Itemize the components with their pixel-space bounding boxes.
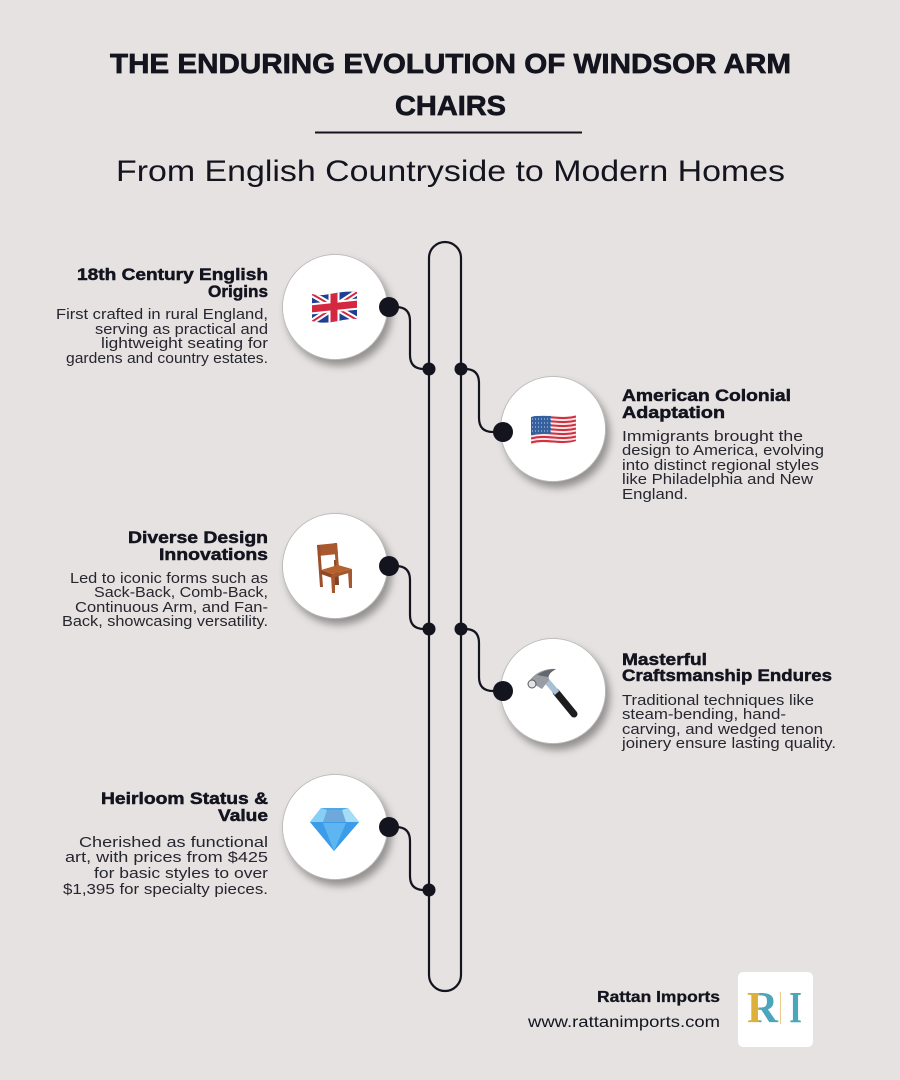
title xyxy=(110,48,791,121)
heading: American adaptation: American Colonial xyxy=(622,386,791,405)
timeline spine xyxy=(429,242,461,991)
text: craftsmanship xyxy=(621,693,836,752)
icon: diamond xyxy=(310,808,359,851)
heading: design innovations: Diverse Design xyxy=(128,528,268,547)
icon: US flag xyxy=(531,415,576,445)
text: heirloom value: $1,395 for specialty pieces. xyxy=(63,882,268,898)
text: design innovations: Sack-Back, Comb-Back, xyxy=(94,585,268,601)
text: English origins xyxy=(56,307,268,367)
circle: heirloom value xyxy=(282,774,388,880)
panel: craftsmanship xyxy=(493,638,836,752)
text: craftsmanship: carving, and wedged tenon xyxy=(622,722,823,738)
connector: English origins xyxy=(389,307,436,376)
heading: English origins: Origins xyxy=(208,282,268,301)
footer: brand: Rattan Imports xyxy=(597,989,720,1006)
node: heirloom value xyxy=(379,817,399,837)
subtitle: From English Countryside to Modern Homes xyxy=(116,155,785,188)
text: English origins: gardens and country estates. xyxy=(66,351,268,367)
text: craftsmanship: steam-bending, hand- xyxy=(622,707,786,723)
heading: American adaptation xyxy=(622,386,791,422)
logo xyxy=(738,972,813,1047)
title: CHAIRS xyxy=(395,90,506,121)
text: English origins: First crafted in rural England, xyxy=(56,307,268,323)
circle: English origins xyxy=(282,254,388,360)
text: American adaptation: England. xyxy=(622,487,688,503)
text: American adaptation xyxy=(622,429,824,503)
heading: craftsmanship xyxy=(622,650,832,685)
text: heirloom value: art, with prices from $425 xyxy=(65,850,268,866)
connector: design innovations xyxy=(389,566,436,636)
node: English origins xyxy=(379,297,399,317)
heading: American adaptation: Adaptation xyxy=(622,403,725,422)
panel: heirloom value xyxy=(63,774,399,898)
circle: craftsmanship xyxy=(500,638,606,744)
heading: heirloom value xyxy=(101,789,268,825)
text: craftsmanship: joinery ensure lasting quality. xyxy=(621,736,836,752)
node: design innovations xyxy=(379,556,399,576)
text: heirloom value xyxy=(63,835,268,898)
heading: English origins xyxy=(77,265,268,301)
text: English origins: lightweight seating for xyxy=(101,336,268,352)
panel: American adaptation xyxy=(493,376,824,503)
text: American adaptation: into distinct regional styles xyxy=(622,458,819,474)
connector: craftsmanship xyxy=(454,622,503,691)
icon: hammer xyxy=(528,669,574,714)
heading: heirloom value: Value xyxy=(218,806,268,825)
node: craftsmanship xyxy=(493,681,513,701)
footer: brand xyxy=(527,989,720,1031)
text: American adaptation: Immigrants brought the xyxy=(622,429,803,445)
icon: UK flag xyxy=(312,292,357,323)
text: design innovations: Led to iconic forms such as xyxy=(70,571,268,587)
footer: brand: www.rattanimports.com xyxy=(527,1014,720,1031)
circle: design innovations xyxy=(282,514,388,618)
heading: heirloom value: Heirloom Status & xyxy=(101,789,268,808)
panel: design innovations xyxy=(62,514,399,630)
logo: R xyxy=(747,983,779,1032)
heading: design innovations: Innovations xyxy=(159,545,268,564)
text: design innovations: Back, showcasing versatility. xyxy=(62,614,268,630)
logo: I xyxy=(789,983,802,1032)
text: craftsmanship: Traditional techniques like xyxy=(622,693,814,709)
heading: craftsmanship: Masterful xyxy=(622,650,707,669)
text: design innovations: Continuous Arm, and Fan- xyxy=(75,600,268,616)
text: heirloom value: Cherished as functional xyxy=(79,835,268,851)
text: heirloom value: for basic styles to over xyxy=(94,866,268,882)
connector: heirloom xyxy=(389,827,436,896)
node: American adaptation xyxy=(493,422,513,442)
panel: English origins xyxy=(56,254,399,367)
text: English origins: serving as practical and xyxy=(95,322,268,338)
heading: design innovations xyxy=(128,528,268,564)
text: design innovations xyxy=(62,571,268,630)
icon: wooden chair xyxy=(317,543,352,593)
circle: American adaptation xyxy=(500,376,606,482)
text: American adaptation: like Philadelphia and New xyxy=(622,472,814,488)
title: THE ENDURING EVOLUTION OF WINDSOR ARM xyxy=(110,48,791,79)
connector: American adaptation xyxy=(454,362,503,432)
heading: craftsmanship: Craftsmanship Endures xyxy=(622,666,832,685)
text: American adaptation: design to America, evolving xyxy=(622,443,824,459)
heading: English origins: 18th Century English xyxy=(77,265,268,284)
